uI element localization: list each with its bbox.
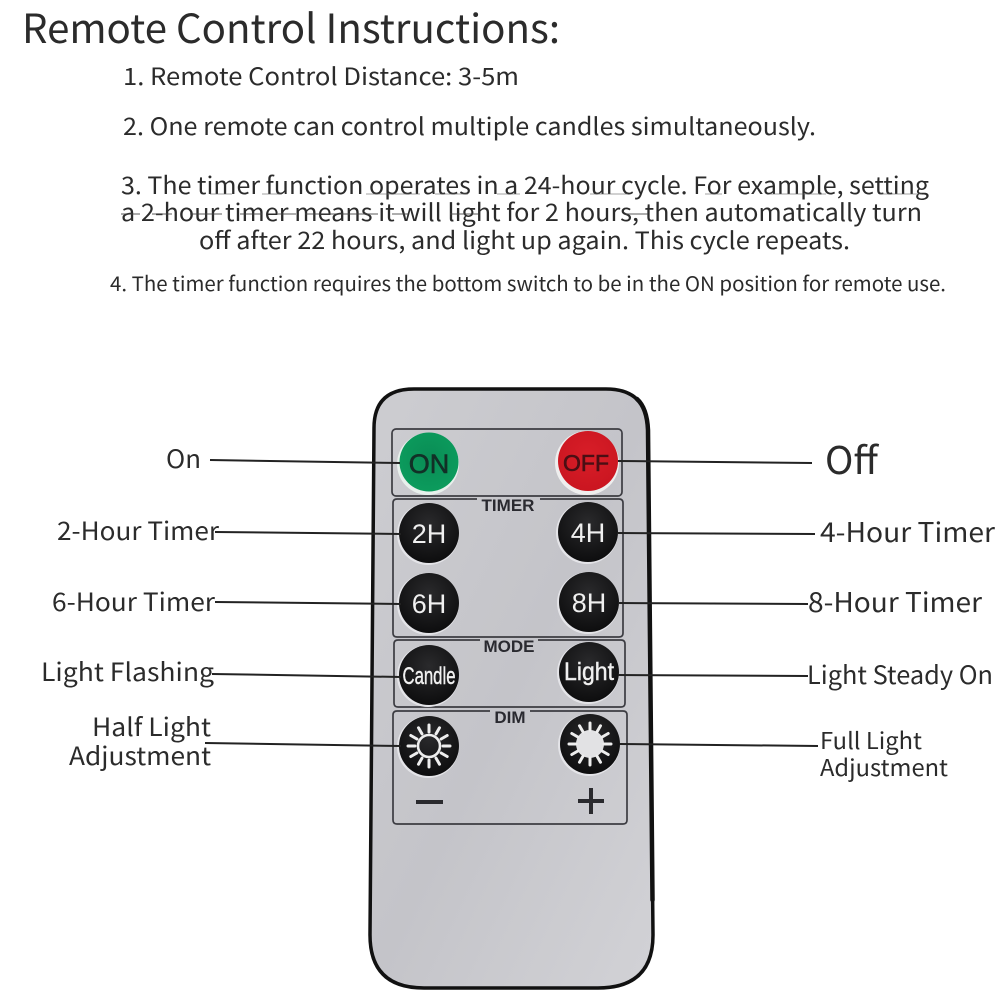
label: full light adjustment: Full Light bbox=[820, 722, 922, 756]
panel: mode: MODE bbox=[484, 637, 534, 656]
label: 4-hour timer: 4-Hour Timer bbox=[820, 511, 996, 550]
remote body bbox=[370, 389, 653, 988]
label: light steady on: Light Steady On bbox=[807, 656, 993, 692]
leader line: flashing bbox=[212, 674, 401, 677]
instruction 3 bbox=[121, 166, 929, 256]
instruction 3: 3. The timer function operates in a 24-hour cycle. For example, setting bbox=[121, 166, 929, 201]
label: full light adjustment bbox=[820, 722, 948, 783]
button: half light bbox=[397, 716, 459, 778]
panel: dim: DIM bbox=[494, 708, 526, 727]
leader line: 6-hour bbox=[215, 602, 401, 604]
panel: timer: TIMER bbox=[482, 496, 534, 515]
button: 6H: 6H bbox=[412, 589, 446, 619]
button: candle: Candle bbox=[402, 663, 456, 690]
panel: timer bbox=[393, 496, 623, 637]
button: off bbox=[555, 431, 619, 495]
panel: dim bbox=[393, 708, 627, 824]
button: 8H bbox=[557, 572, 619, 634]
button: 2H: 2H bbox=[412, 519, 446, 549]
label: half light adjustment: Half Light bbox=[92, 708, 212, 744]
leader line: steady bbox=[618, 675, 808, 676]
label: on: On bbox=[166, 440, 201, 476]
label: half light adjustment bbox=[69, 708, 212, 773]
remote control bbox=[370, 389, 653, 988]
leader line: half bbox=[205, 743, 401, 746]
button: on bbox=[397, 432, 459, 495]
label: light flashing: Light Flashing bbox=[41, 653, 214, 689]
label: half light adjustment: Adjustment bbox=[69, 737, 212, 773]
button: full light bbox=[558, 714, 620, 776]
button: off: OFF bbox=[563, 450, 609, 476]
text block: instructions bbox=[110, 57, 946, 297]
leader line: 8-hour bbox=[618, 603, 808, 604]
instruction 1: 1. Remote Control Distance: 3-5m bbox=[123, 57, 519, 92]
button: 6H bbox=[397, 573, 459, 635]
panel: power bbox=[392, 429, 622, 496]
remote side edge bbox=[637, 399, 652, 900]
instruction 2: 2. One remote can control multiple candles simultaneously. bbox=[123, 107, 816, 142]
instruction 3: off after 22 hours, and light up again. This cycle repeats. bbox=[199, 221, 850, 256]
label: off: Off bbox=[825, 430, 880, 485]
leader line: full bbox=[620, 744, 818, 746]
button: 4H: 4H bbox=[571, 518, 605, 548]
label: 6-hour timer: 6-Hour Timer bbox=[52, 583, 215, 619]
label: 8-hour timer: 8-Hour Timer bbox=[808, 581, 983, 620]
icon: minus bbox=[416, 800, 443, 804]
leader line: on bbox=[210, 460, 400, 463]
label: full light adjustment: Adjustment bbox=[820, 749, 948, 783]
panel: mode bbox=[394, 637, 625, 707]
leader line: 4-hour bbox=[618, 533, 815, 534]
instruction 4: 4. The timer function requires the bottom switch to be in the ON position for remote use. bbox=[110, 268, 946, 297]
icon: plus bbox=[578, 788, 604, 814]
leader line: off bbox=[618, 461, 812, 463]
button: light bbox=[557, 642, 619, 704]
button: 4H bbox=[556, 502, 618, 564]
button: 2H bbox=[397, 503, 459, 565]
leader line: 2-hour bbox=[215, 532, 401, 534]
label: 2-hour timer: 2-Hour Timer bbox=[57, 512, 219, 548]
button: light: Light bbox=[564, 658, 614, 686]
button: on: ON bbox=[409, 449, 449, 479]
button: candle bbox=[397, 645, 459, 707]
instruction 3: a 2-hour timer means it will light for 2 hours, then automatically turn bbox=[121, 193, 922, 228]
button: 8H: 8H bbox=[572, 588, 606, 618]
